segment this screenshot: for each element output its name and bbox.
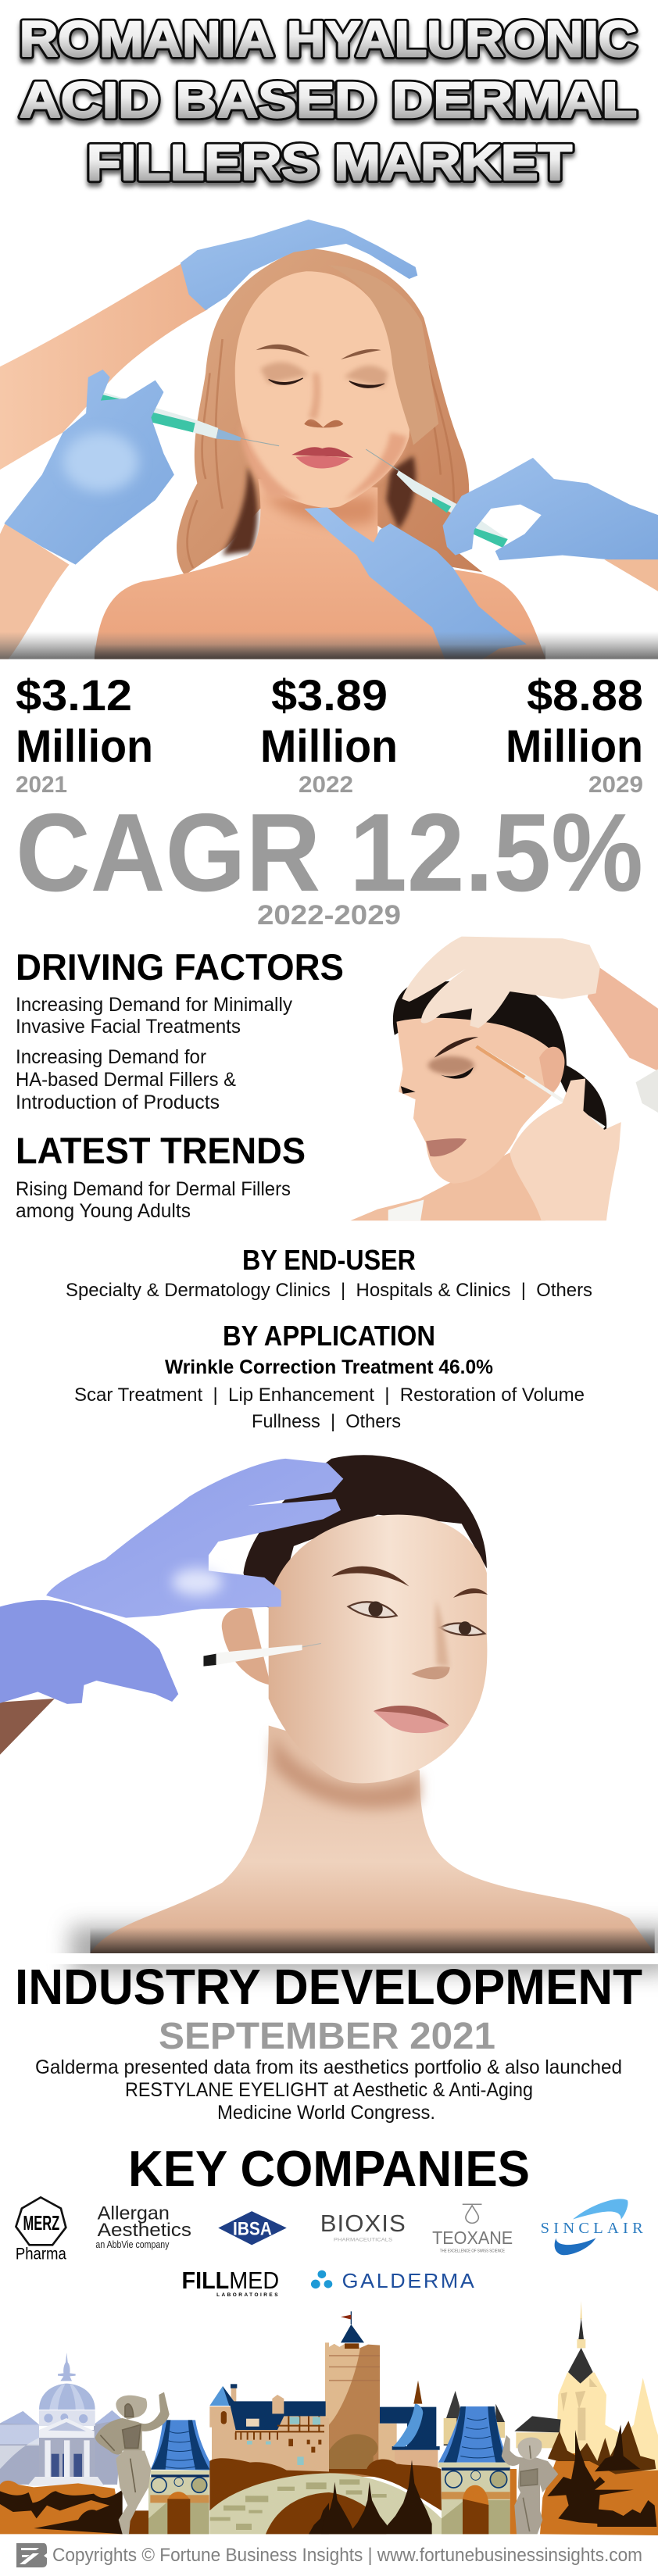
right eye [440,1621,485,1635]
orange foliage [510,2453,658,2535]
dark shrubs [0,2490,123,2534]
company logos [16,2197,643,2298]
face [269,1515,487,1783]
market value 2029: Million [506,721,643,772]
logo: Galderma: GALDERMA [342,2269,474,2292]
title [20,11,637,191]
logo: Merz Pharma: MERZ [23,2211,59,2235]
castle tower [329,2311,380,2477]
lower glove [0,1600,178,1704]
dark roof house [514,2416,561,2448]
logo: Sinclair: SINCLAIR [541,2221,643,2237]
CAGR period: 2022-2029 [257,900,401,931]
logo: Bioxis: BIOXIS [320,2210,406,2237]
latest trends heading: LATEST TRENDS [16,1130,306,1171]
by application heading: BY APPLICATION [223,1320,435,1352]
eastern wing [378,2381,440,2468]
nose shade [435,1600,449,1667]
left glove [4,370,174,565]
glove top [402,937,600,1028]
small castle openings [288,2439,321,2453]
year 2021: 2021 [16,772,67,798]
logo: Teoxane: TEOXANE [432,2228,513,2249]
dormer roof window [246,2419,259,2427]
driving factor one [16,994,292,1038]
photo: brow injection profile [350,937,658,1220]
fir tree [309,2503,329,2534]
logo: Bioxis: PHARMACEUTICALS [334,2238,393,2243]
title: FILLERS MARKET [87,134,572,191]
bridge stones [210,2482,327,2530]
gable shade [223,2386,237,2406]
glove highlight [172,1569,223,1595]
bridge stones [339,2479,387,2498]
fir trees [321,2460,432,2534]
bushes [329,2434,377,2471]
eye shadows [260,362,388,388]
market value 2022: $3.89 [271,670,388,720]
development description [35,2056,622,2124]
lips [291,447,353,458]
neck and shoulders [90,1725,655,1953]
bridge arch [329,2492,386,2534]
brown ground [127,2510,150,2534]
right blue tower [438,2406,510,2534]
left glove highlight [63,432,138,491]
eye shadow [428,1056,474,1074]
bottom dark band [90,1928,655,1953]
right glove [443,458,658,560]
logo: Teoxane [432,2204,513,2254]
bridge [209,2473,329,2534]
logo: Teoxane: THE EXCELLENCE OF SWISS SCIENCE [440,2249,505,2254]
syringe [476,1046,604,1127]
half-timber frame [235,2416,324,2440]
development date: SEPTEMBER 2021 [159,2016,495,2057]
arched window [221,2411,227,2424]
left eye [349,1601,396,1617]
logo: IBSA: IBSA [233,2219,272,2239]
title: ROMANIA HYALURONIC [20,11,637,67]
neck and shoulders [95,479,545,659]
application segments: Scar Treatment | Lip Enhancement | Restoration of Volume [74,1384,585,1406]
face [396,1018,563,1184]
foliage behind bridge [209,2458,329,2510]
driving factor two: HA-based Dermal Fillers & [16,1069,236,1091]
top glove [181,220,417,310]
photo: woman with purple gloves [0,1455,655,1953]
market value 2021 [16,670,153,798]
bottom glove [304,507,527,659]
by end-user heading: BY END-USER [242,1244,416,1276]
neoclassical domed building [0,2353,123,2486]
back spire [444,2391,505,2446]
background brown trees [548,2421,656,2474]
church spire [568,2301,593,2384]
upper glove [46,1459,343,1618]
jaw shade [273,1735,420,1809]
bridge [329,2473,442,2534]
syringe [203,1643,321,1667]
hair strands [188,330,454,568]
market value 2021: $3.12 [16,670,132,720]
castle chimney [231,2387,236,2403]
lips [374,1706,449,1733]
development description: RESTYLANE EYELIGHT at Aesthetic & Anti-Aging [125,2079,533,2101]
left lower arm [0,523,70,659]
title: FILLERS MARKET [87,134,572,191]
castle tower stripe [325,2342,329,2418]
logo: Allergan Aesthetics: Allergan [98,2203,170,2224]
latest trend text: Rising Demand for Dermal Fillers [16,1178,291,1200]
driving factor one: Invasive Facial Treatments [16,1016,241,1038]
dark fir and shrubs [547,2424,656,2527]
driving factor two: Increasing Demand for [16,1046,206,1068]
sleeve [636,1069,658,1113]
upper lip [374,1706,449,1725]
ear [222,1608,270,1685]
closed eye [401,1067,474,1094]
hair [243,1455,487,1609]
hair shadow [223,456,416,556]
driving factor two [16,1046,236,1113]
market value 2021: Million [16,721,153,772]
logo: Allergan Aesthetics: an AbbVie company [95,2239,170,2250]
lips [426,1138,467,1156]
logo: Fillmed: LABORATOIRES [216,2292,277,2298]
title: ACID BASED DERMAL [20,72,637,128]
bottom dark band [95,645,545,659]
application segments [74,1384,585,1432]
neck [350,1141,545,1220]
closed eyes [269,378,384,388]
ear [539,1047,564,1092]
eyebrows [256,345,381,359]
lower lip [296,456,350,468]
market value 2029 [506,670,643,798]
end-user segments: Specialty & Dermatology Clinics | Hospitals & Clinics | Others [66,1280,592,1301]
skyline illustration right [321,2301,658,2535]
logo: Sinclair [541,2199,643,2255]
cheek shade [241,423,407,500]
nose shade [309,373,320,420]
skyline illustration left [0,2342,329,2534]
chimney cap [231,2384,237,2388]
glove lower [510,1078,621,1220]
latest trend text [16,1178,291,1222]
doctor arm [588,965,658,1071]
left syringe [98,392,279,446]
market value 2022 [260,670,398,798]
syringe tip [476,1046,524,1077]
left blue tower [148,2420,215,2534]
left upper arm [0,263,208,470]
footer logo [16,2543,47,2567]
right forearm [604,553,658,591]
hair [177,248,483,575]
development description: Medicine World Congress. [217,2102,435,2124]
title: ACID BASED DERMAL [20,72,637,128]
driving factor two: Introduction of Products [16,1091,220,1113]
logo: Allergan Aesthetics: Aesthetics [98,2220,191,2241]
hero photo: woman receiving filler injections [0,220,658,659]
autumn foliage [0,2481,123,2534]
industry development heading: INDUSTRY DEVELOPMENT [15,1959,642,2015]
foliage [329,2460,442,2510]
soft base shadow [70,1926,658,1973]
statue figure [502,2435,558,2534]
brows [331,1567,488,1598]
white top [388,1200,424,1220]
nose [411,1667,450,1679]
castle windows [247,2417,320,2465]
nose [304,420,343,427]
dormer [272,2395,284,2413]
logo: Merz Pharma [16,2197,66,2263]
latest trend text: among Young Adults [16,1200,191,1222]
logo: Merz Pharma: Pharma [16,2246,66,2263]
statue figure [95,2392,170,2534]
leading application: Wrinkle Correction Treatment 46.0% [165,1356,493,1378]
footer [16,2543,642,2567]
development description: Galderma presented data from its aesthetics portfolio & also launched [35,2056,622,2078]
logo: Allergan Aesthetics [95,2203,191,2250]
year 2029: 2029 [588,772,643,798]
blue gable [209,2386,237,2406]
bottom fade [0,631,658,659]
hair over face [327,265,438,445]
application segments: Fullness | Others [252,1411,401,1432]
market value 2029: $8.88 [527,670,643,720]
neck shade [263,496,377,525]
logo: Fillmed: FILLMED [182,2267,279,2294]
year 2022: 2022 [299,772,353,798]
castle walls [209,2406,329,2471]
bridge arch [266,2492,329,2534]
key companies heading: KEY COMPANIES [128,2140,530,2197]
hair [393,980,606,1156]
driving factors heading: DRIVING FACTORS [16,946,344,988]
church [556,2373,658,2471]
market value 2022: Million [260,721,398,772]
forearm [0,1699,55,1755]
church details [561,2378,597,2440]
driving factor one: Increasing Demand for Minimally [16,994,292,1016]
face [235,271,409,508]
navy roof [229,2401,326,2430]
logo: IBSA [218,2211,287,2245]
right syringe [366,449,508,548]
white strip below photo [0,1953,658,1964]
title: ROMANIA HYALURONIC [20,11,637,67]
eyebrow [434,1037,478,1058]
